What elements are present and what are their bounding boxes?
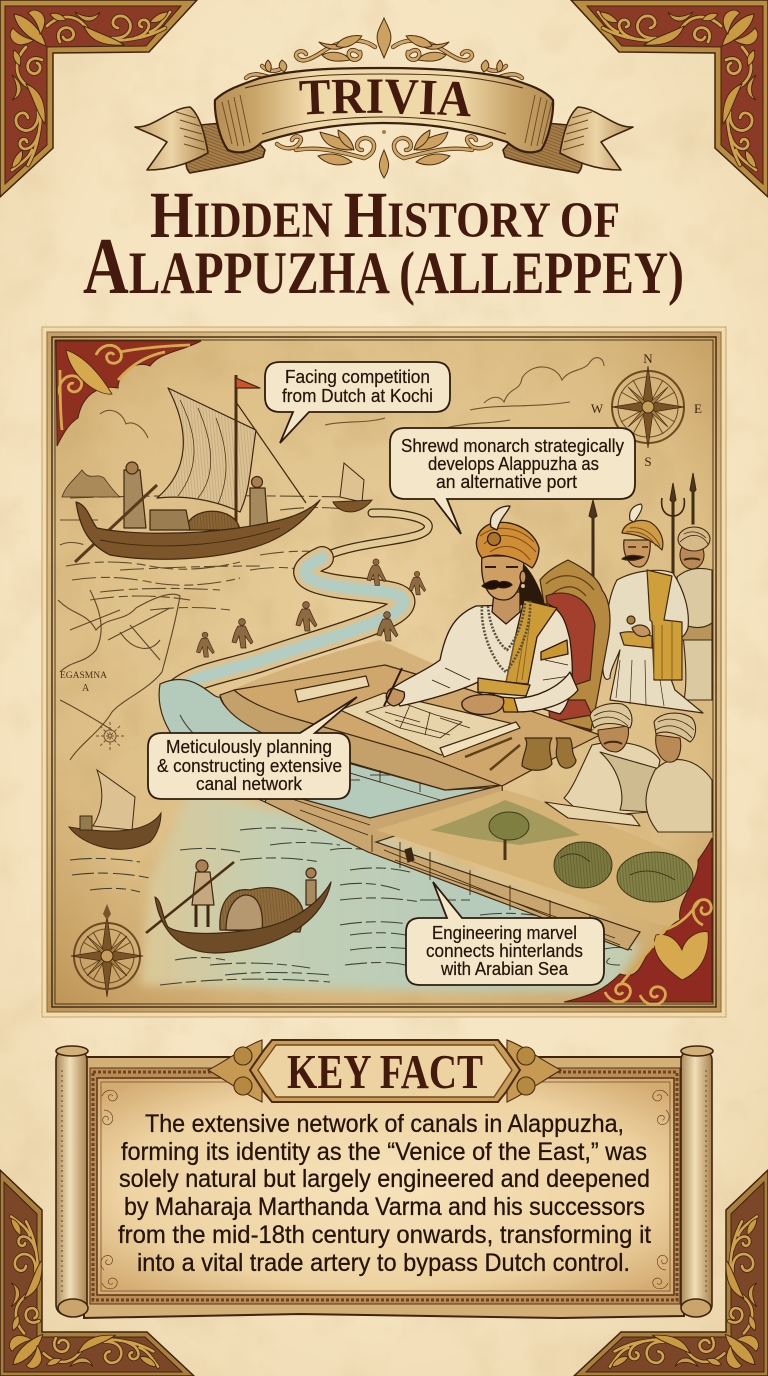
attendant far right	[677, 527, 712, 700]
callout: Dutch competition: from Dutch at Kochi	[282, 385, 433, 406]
key fact body text: from the mid-18th century onwards, transforming it	[118, 1221, 651, 1249]
key fact body text: The extensive network of canals in Alappuzha,	[145, 1110, 624, 1138]
callout: Dutch competition	[265, 362, 450, 443]
map label letter: A	[82, 683, 90, 694]
top-left red ornament	[54, 341, 201, 446]
desk with plans	[234, 665, 600, 786]
compass rose bottom left	[71, 904, 143, 997]
compass rose top right: E	[694, 401, 702, 416]
maharaja	[384, 506, 578, 714]
oar	[75, 485, 157, 562]
callout: canal planning: & constructing extensive	[157, 755, 342, 776]
key fact body text: forming its identity as the “Venice of the East,” was	[121, 1138, 647, 1166]
callout: engineering marvel: connects hinterlands	[426, 940, 583, 961]
neck and face	[492, 592, 520, 624]
corner ornament: top right	[571, 0, 768, 197]
tools and pots	[465, 738, 520, 770]
key fact badge: KEY FACT	[287, 1044, 483, 1099]
banner left tail	[135, 107, 265, 173]
land bushes	[376, 790, 712, 930]
open sea	[140, 790, 640, 992]
banner right tail	[503, 107, 633, 173]
key fact body text	[118, 1110, 651, 1277]
land between canal and desk	[178, 640, 470, 720]
left scroll roller	[56, 1046, 88, 1317]
armband	[541, 640, 568, 660]
gold shawl	[506, 600, 557, 684]
robe	[390, 604, 572, 714]
callout: shrewd monarch	[390, 428, 635, 534]
map compass mark	[96, 722, 124, 750]
key fact badge	[208, 1040, 561, 1102]
barrel cabin	[186, 511, 240, 530]
covered houseboat	[146, 860, 331, 953]
map label: EGASMNA	[60, 671, 107, 681]
big sailing boat	[75, 375, 320, 562]
small distant boat	[333, 463, 372, 512]
scroll sheet	[84, 1057, 684, 1318]
hull	[76, 500, 320, 559]
banner ribbon	[215, 68, 553, 152]
trivia banner: TRIVIA	[299, 80, 470, 116]
right scroll roller	[681, 1046, 713, 1317]
callout: shrewd monarch: develops Alappuzha as	[428, 453, 599, 474]
key fact body text: by Maharaja Marthanda Varma and his successors	[124, 1193, 645, 1221]
clouds	[100, 358, 604, 438]
key fact body text: into a vital trade artery to bypass Dutch control.	[137, 1249, 630, 1277]
callout: engineering marvel: Engineering marvel	[432, 922, 577, 943]
key fact scroll	[56, 1040, 713, 1318]
title: HIDDEN HISTORY OF	[150, 179, 620, 252]
callout: canal planning: canal network	[196, 773, 303, 794]
throne	[540, 560, 610, 736]
compass rose top right: N	[643, 351, 653, 366]
callout: shrewd monarch: Shrewd monarch strategically	[401, 435, 625, 456]
key fact body text: solely natural but largely engineered and deepened	[119, 1165, 650, 1193]
bottom-right red ornament	[564, 838, 712, 1005]
far shore reeds	[62, 470, 120, 497]
corner ornament: bottom right	[574, 1170, 768, 1376]
callout: Dutch competition: Facing competition	[285, 366, 430, 387]
stone wall	[220, 690, 640, 950]
left boat	[69, 770, 161, 849]
blueprint sheet	[340, 693, 518, 755]
workers on canal	[196, 559, 426, 657]
winding canal	[172, 513, 428, 695]
callout: engineering marvel: with Arabian Sea	[440, 958, 569, 979]
necklaces	[482, 600, 530, 672]
forearm and cuff	[510, 672, 578, 712]
spears	[589, 473, 696, 590]
title	[83, 179, 684, 311]
trivia banner	[134, 16, 634, 179]
banner word	[296, 113, 476, 117]
turban	[476, 522, 539, 568]
attendant with sash	[603, 504, 703, 713]
callout: engineering marvel	[406, 882, 604, 985]
banner flourish below	[277, 130, 491, 178]
corner ornament: top left	[0, 0, 197, 197]
canal bay	[159, 679, 502, 838]
compass rose top right	[591, 351, 702, 469]
illustrated map panel	[42, 327, 726, 1017]
corner ornament: bottom left	[0, 1170, 194, 1376]
sea ripples by the big boat	[60, 496, 352, 610]
text plaque	[97, 1078, 674, 1295]
banner flourish above	[246, 18, 522, 80]
crew	[124, 470, 146, 528]
callout: canal planning: Meticulously planning	[166, 736, 332, 757]
callout: shrewd monarch: an alternative port	[436, 471, 577, 492]
water ripples	[70, 715, 632, 985]
compass rose top right: W	[591, 401, 604, 416]
callout: canal planning	[148, 697, 357, 799]
compass rose top right: S	[644, 454, 652, 469]
sail	[157, 388, 256, 512]
rolled scroll	[295, 676, 369, 702]
waist sash	[478, 678, 530, 696]
map lines	[58, 590, 180, 760]
plaque corner flourishes	[99, 1090, 671, 1289]
hair	[518, 560, 544, 606]
scribes	[545, 704, 712, 832]
